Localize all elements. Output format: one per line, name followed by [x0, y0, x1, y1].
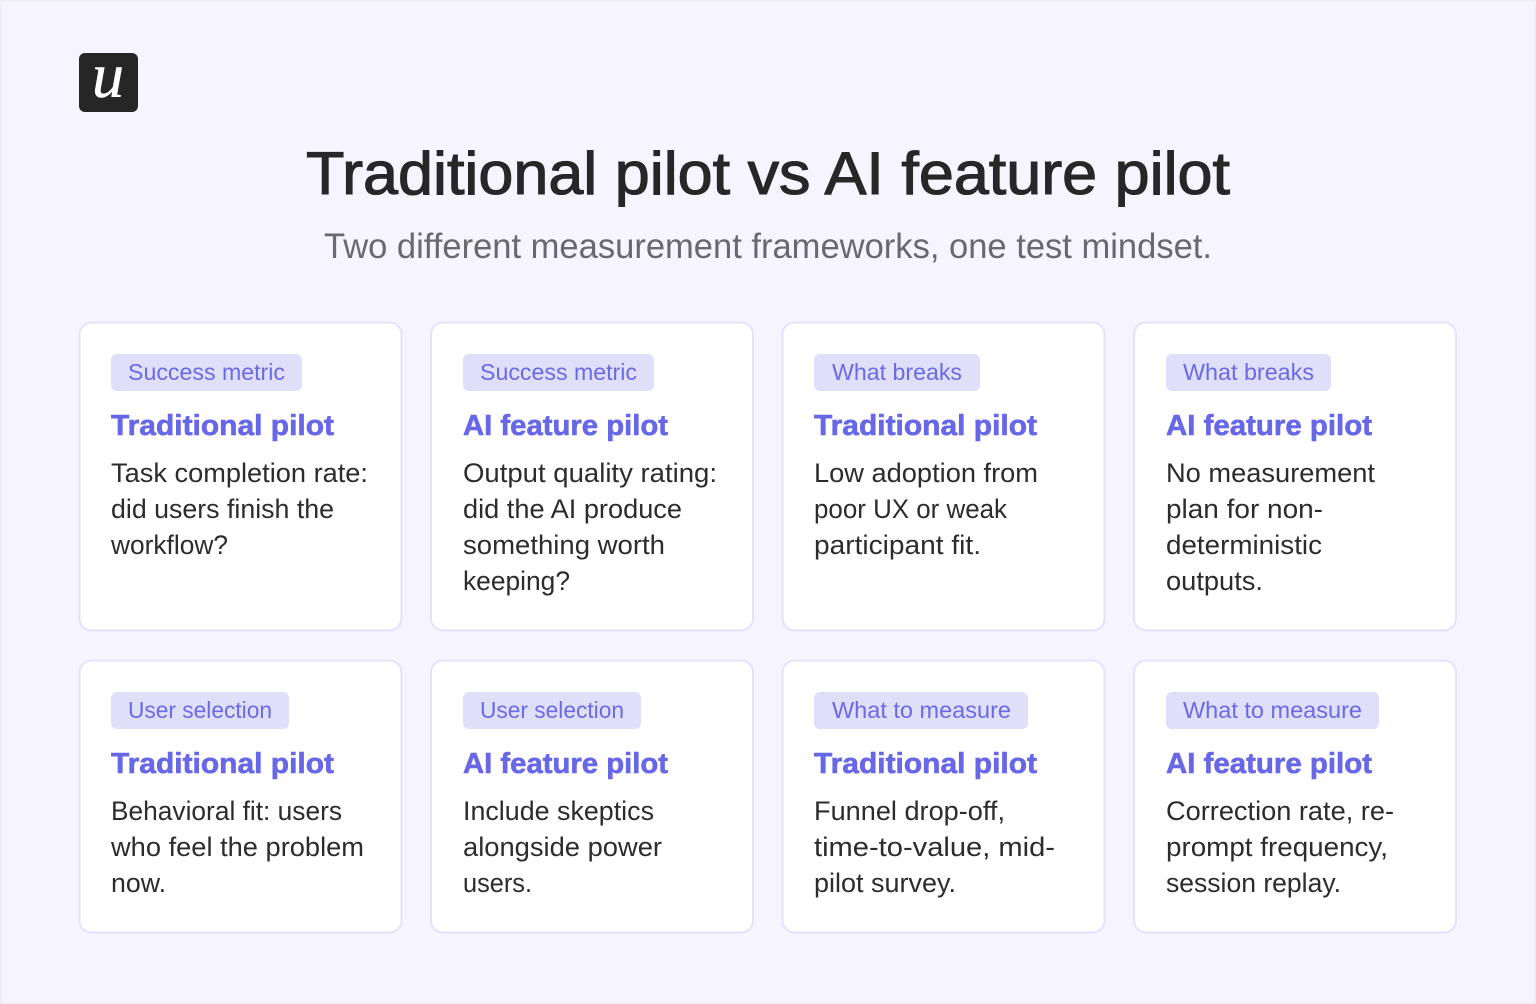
- heading: AI feature pilot: [463, 748, 668, 780]
- body text: [1166, 458, 1375, 596]
- body text: users.: [463, 868, 532, 898]
- panel: what breaks, traditional pilot: [782, 322, 1104, 630]
- badge: What to measure: [1183, 697, 1362, 723]
- badge: [814, 354, 980, 391]
- body text: [463, 458, 717, 596]
- body text: [110, 796, 364, 898]
- body text: deterministic: [1166, 530, 1322, 560]
- badge: User selection: [480, 697, 624, 723]
- body text: No measurement: [1166, 458, 1375, 488]
- body text: now.: [111, 868, 166, 898]
- badge: [1166, 354, 1331, 391]
- heading: AI feature pilot: [463, 410, 668, 442]
- body text: pilot survey.: [814, 868, 956, 898]
- body text: keeping?: [463, 566, 570, 596]
- body text: workflow?: [110, 530, 228, 560]
- heading: AI feature pilot: [1166, 748, 1372, 780]
- subtitle: Two different measurement frameworks, one test mindset.: [324, 227, 1212, 266]
- body text: who feel the problem: [110, 832, 364, 862]
- heading: AI feature pilot: [1166, 410, 1372, 442]
- body text: Low adoption from: [814, 458, 1038, 488]
- panel: user selection, AI feature pilot: [431, 660, 753, 932]
- body text: poor UX or weak: [814, 494, 1007, 524]
- body text: Output quality rating:: [463, 458, 717, 488]
- panel: what to measure, AI feature pilot: [1134, 660, 1456, 932]
- icon: logo: [79, 40, 138, 112]
- body text: Include skeptics: [463, 796, 654, 826]
- body text: something worth: [463, 530, 665, 560]
- badge: [463, 692, 641, 729]
- heading: Traditional pilot: [814, 748, 1037, 780]
- body text: prompt frequency,: [1166, 832, 1388, 862]
- heading: Traditional pilot: [814, 410, 1037, 442]
- body text: [1166, 796, 1394, 898]
- panel: success metric, traditional pilot: [80, 322, 402, 630]
- body text: alongside power: [463, 832, 662, 862]
- body text: Task completion rate:: [111, 458, 368, 488]
- badge: [814, 692, 1028, 729]
- heading: Traditional pilot: [111, 748, 334, 780]
- body text: participant fit.: [814, 530, 981, 560]
- body text: plan for non-: [1166, 494, 1323, 524]
- badge: User selection: [128, 697, 272, 723]
- body text: Behavioral fit: users: [111, 796, 342, 826]
- badge: What breaks: [1183, 359, 1314, 385]
- body text: did the AI produce: [463, 494, 682, 524]
- panel: what breaks, AI feature pilot: [1134, 322, 1456, 630]
- panel: user selection, traditional pilot: [80, 660, 402, 932]
- badge: What breaks: [832, 359, 962, 385]
- body text: time-to-value, mid-: [814, 832, 1055, 862]
- body text: Funnel drop-off,: [814, 796, 1005, 826]
- icon: logo: u: [92, 40, 124, 111]
- badge: [463, 354, 654, 391]
- body text: did users finish the: [111, 494, 334, 524]
- body text: [814, 458, 1038, 560]
- body text: Correction rate, re-: [1166, 796, 1394, 826]
- badge: [111, 692, 289, 729]
- panel: what to measure, traditional pilot: [782, 660, 1104, 932]
- panel: success metric, AI feature pilot: [431, 322, 753, 630]
- body text: session replay.: [1166, 868, 1341, 898]
- badge: [111, 354, 302, 391]
- body text: outputs.: [1166, 566, 1263, 596]
- title: Traditional pilot vs AI feature pilot: [306, 140, 1230, 207]
- badge: [1166, 692, 1379, 729]
- badge: Success metric: [128, 359, 285, 385]
- heading: Traditional pilot: [111, 410, 334, 442]
- body text: [463, 796, 662, 898]
- badge: What to measure: [832, 697, 1011, 723]
- body text: [814, 796, 1055, 898]
- body text: [110, 458, 368, 560]
- badge: Success metric: [480, 359, 637, 385]
